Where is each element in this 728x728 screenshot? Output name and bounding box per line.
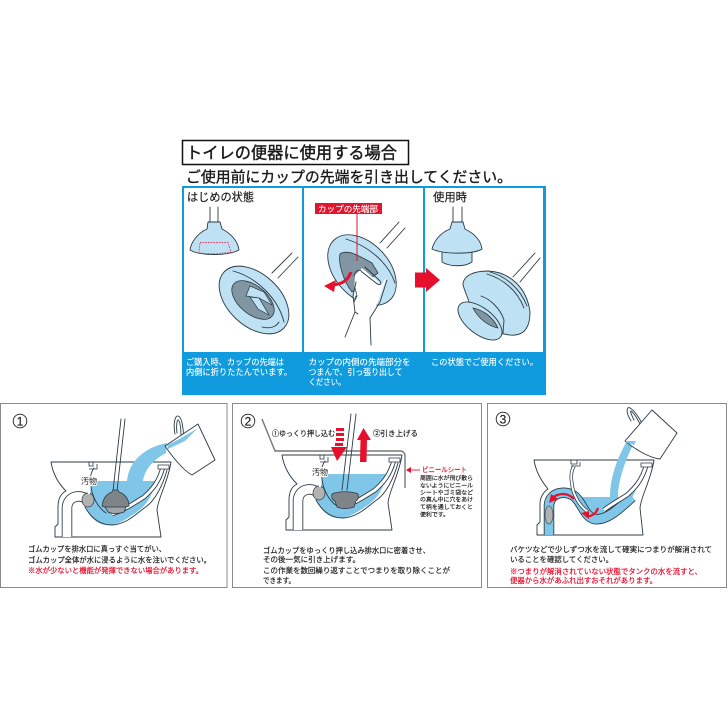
step number 3: 3 <box>500 412 507 426</box>
heading: in use: 使用時 <box>433 190 467 204</box>
caption: initial state: ご購入時、カップの先端は <box>186 357 284 367</box>
arrow: pull up <box>357 428 371 462</box>
illustration: toilet with sheet: 汚物 <box>312 467 328 477</box>
caption: initial state: 内側に折りたたんでいます。 <box>186 367 292 377</box>
icon: small cup folded <box>190 207 239 254</box>
instruction text 3: いることを確認してください。 <box>510 555 613 564</box>
instruction text 3: 便器から水があふれ出すおそれがあります。 <box>510 576 657 585</box>
label: push slowly: ①ゆっくり押し込む <box>272 429 335 438</box>
arrow: push slowly <box>331 428 347 461</box>
panel: preparation <box>182 186 546 395</box>
callout: plastic sheet: シートやゴミ袋など <box>420 488 473 496</box>
caption: pull out: つまんで、引っ張り出して <box>308 367 402 377</box>
arrow: pull direction <box>324 272 351 292</box>
instruction text 1 <box>28 544 211 575</box>
instruction text 1: ゴムカップを排水口に真っすぐ当てがい、 <box>28 544 166 554</box>
panel: step 1 <box>0 404 227 588</box>
step number 2 <box>241 414 255 428</box>
caption: initial state <box>186 357 292 377</box>
caption: in use: この状態でご使用ください。 <box>431 357 538 367</box>
instruction text 3: バケツなどで少しずつ水を流して確実につまりが解消されて <box>510 545 712 554</box>
instruction text 2: できます。 <box>263 576 295 585</box>
callout: plastic sheet: て柄を通しておくと <box>420 503 473 511</box>
heading: initial state: はじめの状態 <box>187 190 254 204</box>
instruction text 2: ゴムカップをゆっくり押し込み排水口に密着させ、 <box>263 546 430 555</box>
bucket <box>625 408 677 459</box>
callout: plastic sheet: の真ん中に穴をあけ <box>420 496 473 504</box>
arrow: lower flow <box>581 508 598 519</box>
callout: plastic sheet: 便利です。 <box>420 510 449 518</box>
plunger <box>332 414 358 508</box>
instruction text 2: この作業を数回繰り返すことでつまりを取り除くことが <box>263 566 451 575</box>
callout: plastic sheet: ないようにビニール <box>420 482 473 490</box>
bucket <box>165 416 215 475</box>
caption: pull out: ください。 <box>308 377 346 387</box>
subtitle: ご使用前にカップの先端を引き出してください。 <box>186 169 512 186</box>
callout: plastic sheet: 周囲に水が飛び散ら <box>420 474 473 482</box>
title: トイレの便器に使用する場合 <box>186 144 397 162</box>
illustration: toilet with sheet <box>262 414 418 530</box>
step number 3 <box>496 412 510 426</box>
illustration: toilet with water <box>51 416 215 537</box>
icon: large cup with hand <box>314 222 410 345</box>
panel: step 3 <box>488 404 726 588</box>
callout: plastic sheet <box>406 465 473 518</box>
instruction text 1: ※水が少ないと機能が発揮できない場合があります。 <box>28 566 203 575</box>
icon: large cup folded <box>206 253 302 347</box>
step number 1: 1 <box>17 414 24 428</box>
panel: step 2 <box>232 404 482 588</box>
illustration: toilet flushed <box>534 408 677 535</box>
instruction text 3 <box>510 545 712 585</box>
caption: pull out: カップの内側の先端部分を <box>308 357 410 367</box>
arrow: upper flow <box>549 494 574 503</box>
callout: cup tip label <box>315 203 382 261</box>
instruction text 2: その後一気に引き上げます。 <box>263 555 360 564</box>
icon: large cup extended <box>452 253 540 347</box>
caption: pull out <box>308 357 410 387</box>
plastic sheet <box>262 419 405 488</box>
label: pull up: ②引き上げる <box>373 429 418 438</box>
instruction text 1: ゴムカップ全体が水に浸るように水を注いでください。 <box>28 556 211 564</box>
arrow: next step <box>415 268 440 292</box>
plunger <box>102 419 129 514</box>
step number 1 <box>13 414 27 428</box>
step number 2: 2 <box>245 414 252 428</box>
instruction text 2 <box>263 546 451 585</box>
icon: small cup extended <box>432 207 482 266</box>
instruction text 3: ※つまりが解消されていない状態でタンクの水を流すと、 <box>510 567 702 576</box>
callout: cup tip label: カップの先端部 <box>318 204 378 214</box>
callout: plastic sheet: ビニールシート <box>422 465 467 474</box>
illustration: toilet with water: 汚物 <box>81 476 97 486</box>
